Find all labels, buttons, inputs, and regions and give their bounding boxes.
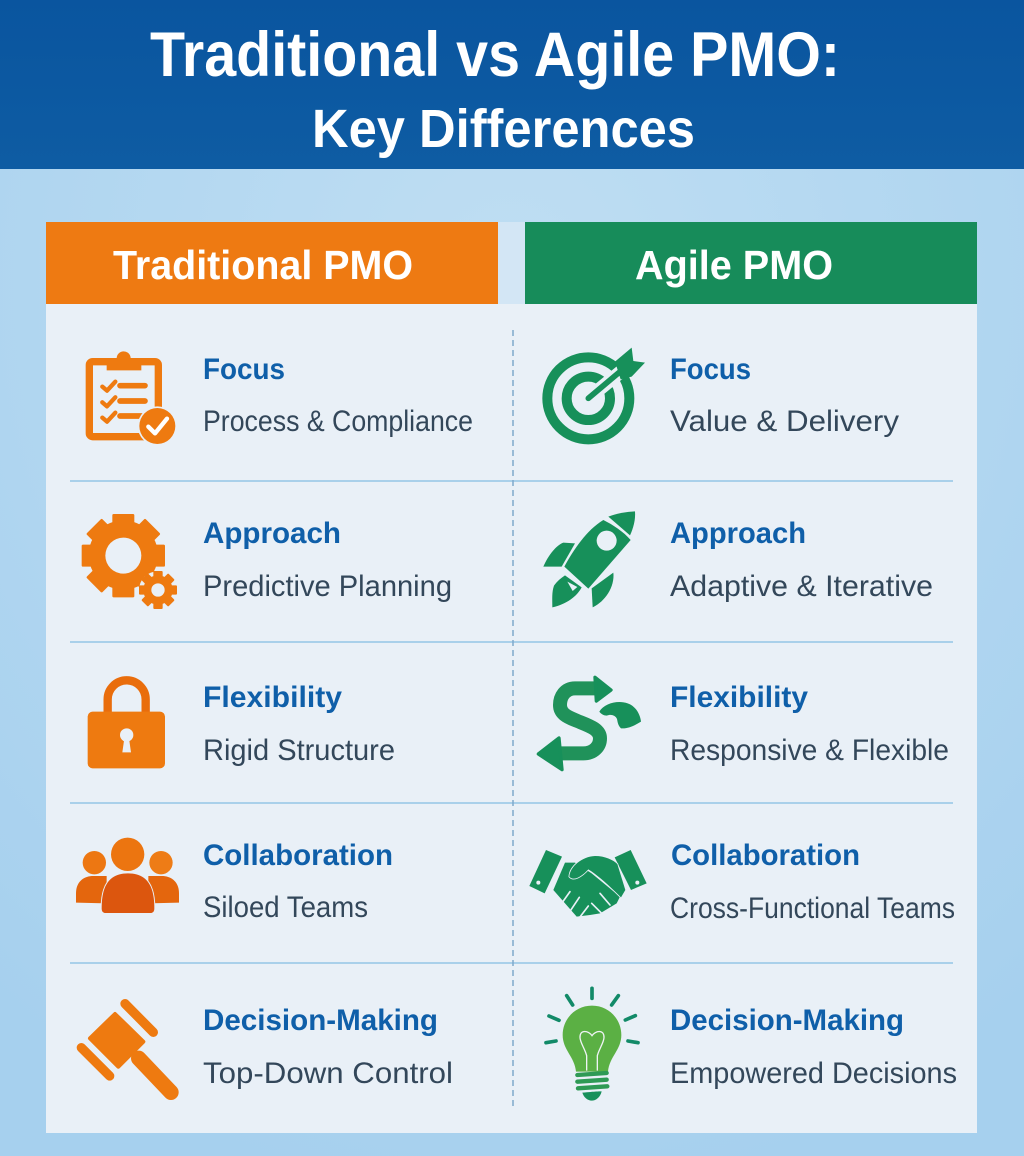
row: Flexibility (Traditional): Flexibility <box>203 681 342 714</box>
row: Focus (Traditional): Process & Compliance <box>203 405 473 438</box>
row: Collaboration (Traditional): Siloed Teams <box>203 891 368 924</box>
row: Decision-Making (Agile): Decision-Making <box>670 1004 904 1037</box>
row: Collaboration (Agile): Cross-Functional Teams <box>670 892 955 925</box>
comparison panel <box>46 222 977 1133</box>
icon: team <box>76 838 179 913</box>
row: Approach (Traditional): Predictive Planning <box>203 570 452 603</box>
column header: Traditional PMO: Traditional PMO <box>113 242 413 288</box>
subtitle: Key Differences <box>312 99 695 159</box>
row: Focus (Agile): Focus <box>670 353 751 386</box>
row: Decision-Making (Agile) <box>670 1004 957 1090</box>
header banner <box>0 0 1024 169</box>
row: Collaboration (Agile): Collaboration <box>671 839 860 872</box>
icon: target with arrow <box>547 348 645 439</box>
row: Collaboration (Traditional) <box>203 839 393 924</box>
title: Traditional vs Agile PMO: <box>150 20 840 90</box>
row: Flexibility (Traditional) <box>203 681 395 767</box>
row: Decision-Making (Traditional): Top-Down Control <box>203 1057 453 1090</box>
row: Approach (Traditional) <box>203 517 452 603</box>
row: Decision-Making (Traditional) <box>203 1004 453 1090</box>
row: Focus (Traditional): Focus <box>203 353 285 386</box>
row: Approach (Agile): Approach <box>670 517 806 550</box>
row: Flexibility (Agile): Flexibility <box>670 681 808 714</box>
icon: flexible arrows <box>538 677 641 770</box>
row: Focus (Agile): Value & Delivery <box>670 405 899 438</box>
row: Approach (Agile): Adaptive & Iterative <box>670 570 933 603</box>
icon: rocket <box>543 511 635 607</box>
icon: gears <box>82 514 177 609</box>
icon: handshake <box>529 850 647 917</box>
row: Collaboration (Agile) <box>670 839 955 925</box>
icon: gavel <box>81 1004 171 1092</box>
row: Flexibility (Agile): Responsive & Flexible <box>670 734 949 767</box>
row: Approach (Agile) <box>670 517 933 603</box>
row: Flexibility (Traditional): Rigid Structure <box>203 734 395 767</box>
icon: lightbulb <box>546 988 638 1101</box>
row: Focus (Traditional) <box>203 353 473 438</box>
row: Decision-Making (Traditional): Decision-Making <box>203 1004 438 1037</box>
row: Decision-Making (Agile): Empowered Decisions <box>670 1057 957 1090</box>
row: Collaboration (Traditional): Collaboration <box>203 839 393 872</box>
column header: Agile PMO <box>525 222 977 304</box>
column header: Traditional PMO <box>46 222 498 304</box>
icon: clipboard checklist <box>89 351 177 446</box>
row: Focus (Agile) <box>670 353 899 438</box>
column header: Agile PMO: Agile PMO <box>635 242 833 288</box>
icon: padlock <box>88 680 165 768</box>
row: Approach (Traditional): Approach <box>203 517 341 550</box>
row: Flexibility (Agile) <box>670 681 949 767</box>
